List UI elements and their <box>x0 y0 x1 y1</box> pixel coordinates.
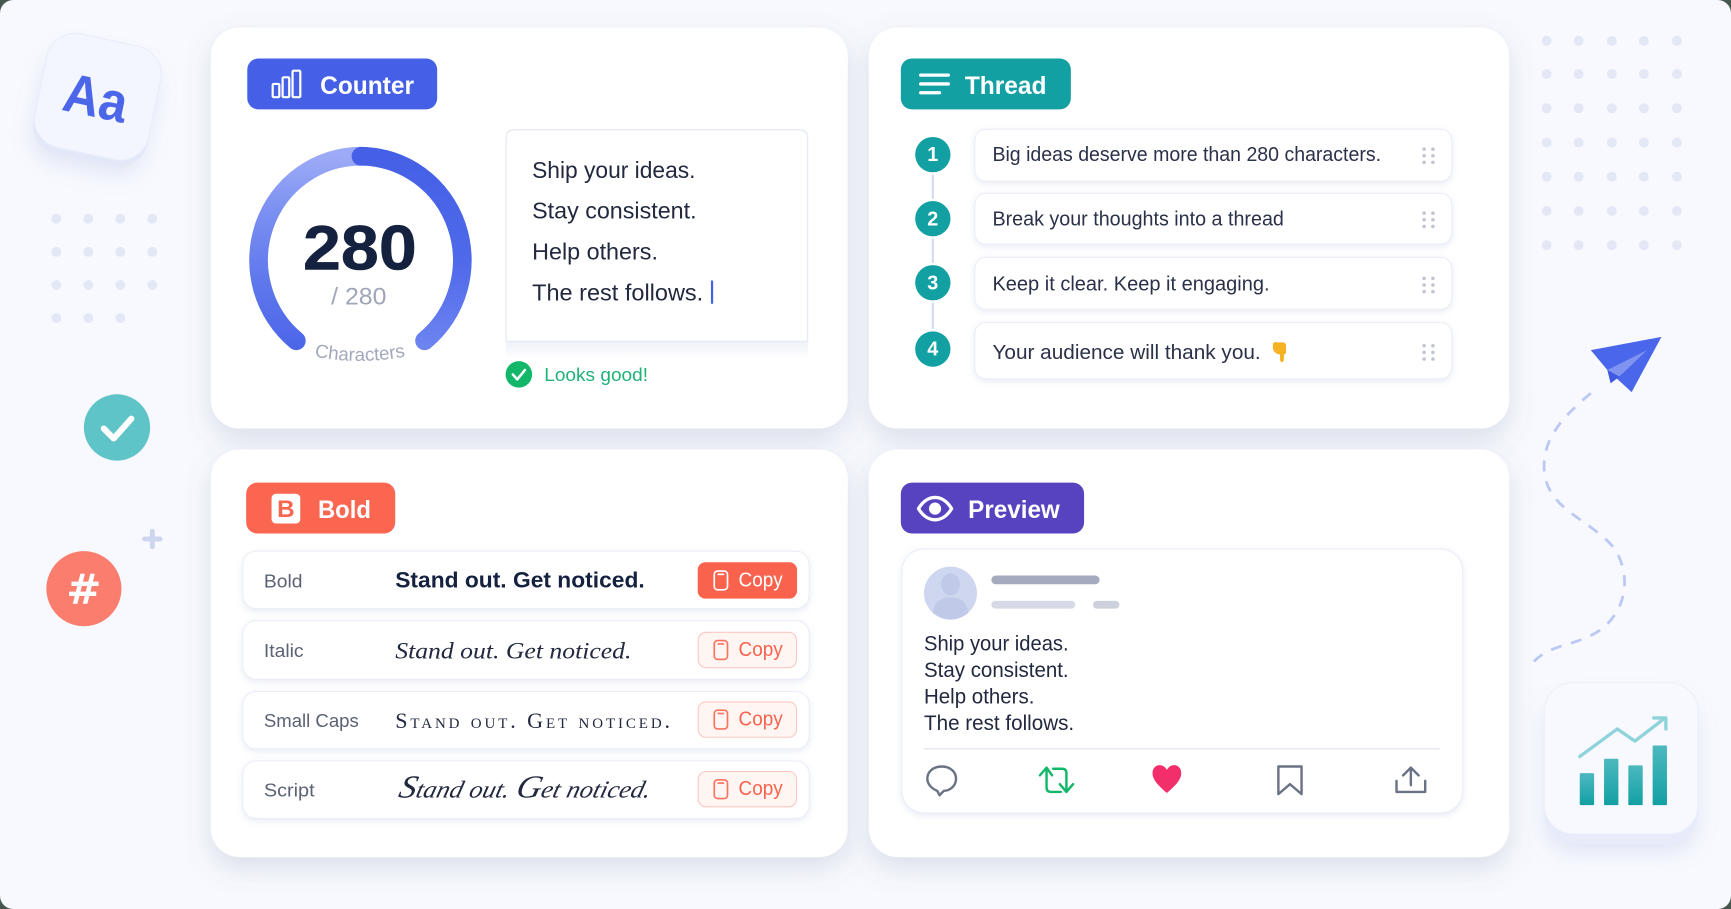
style row: italic: Stand out. Get noticed. <box>395 638 631 664</box>
decoration: right dot grid <box>1542 36 1682 250</box>
badge: Preview <box>901 483 1084 533</box>
style row: script: Script <box>264 779 315 800</box>
style row: bold: Stand out. Get noticed. <box>395 568 645 593</box>
style row: italic <box>243 621 809 679</box>
thread row 4: Your audience will thank you. <box>992 342 1261 364</box>
icon: coral hashtag badge <box>46 551 121 626</box>
post text: Stay consistent. <box>924 659 1069 682</box>
panel: preview <box>869 450 1509 857</box>
arrow: dashed flight path <box>1531 393 1625 665</box>
icon: heart <box>1153 765 1181 793</box>
post text: The rest follows. <box>924 712 1074 735</box>
style row: bold: Bold <box>264 571 302 592</box>
thread connector and numbers <box>913 135 953 369</box>
thread row 1: Big ideas deserve more than 280 characters. <box>992 144 1381 166</box>
badge: Bold: Bold <box>318 496 371 524</box>
thread connector and numbers: 4 <box>927 339 938 361</box>
thread connector and numbers: 3 <box>927 272 938 294</box>
style row: small caps: Stand out. Get noticed. <box>395 708 670 733</box>
style row: small caps: Copy <box>739 709 783 731</box>
text input box: The rest follows. <box>532 279 703 305</box>
badge: Bold <box>246 483 395 533</box>
gauge: character count ring: Characters <box>316 344 404 361</box>
text input box: Help others. <box>532 239 658 265</box>
style row: bold <box>243 551 809 609</box>
panel: counter <box>204 50 855 447</box>
post card <box>902 549 1463 813</box>
thread row 3: Keep it clear. Keep it engaging. <box>992 273 1270 295</box>
icon: share <box>1397 768 1425 792</box>
panel: bold <box>211 450 848 857</box>
style row: script: Stand out. Get noticed. <box>395 770 656 805</box>
icon: teal check badge <box>84 394 150 461</box>
badge: Thread: Thread <box>965 72 1047 100</box>
badge: Preview: Preview <box>968 496 1060 524</box>
post text: Ship your ideas. <box>924 633 1069 656</box>
panel: thread <box>869 28 1509 429</box>
decoration: left dot grid <box>51 214 157 323</box>
badge: Thread <box>901 59 1071 109</box>
gauge: character count ring: 280 <box>303 213 417 284</box>
post text: Help others. <box>924 686 1034 709</box>
icon: plus <box>145 531 160 547</box>
icon: paper plane <box>1591 337 1661 392</box>
icon: comment <box>927 767 956 795</box>
thread row 4 <box>975 323 1452 379</box>
style row: script: Copy <box>739 778 783 800</box>
thread row 2 <box>975 193 1452 244</box>
gauge: character count ring: / 280 <box>331 283 386 310</box>
icon: bookmark <box>1278 767 1302 794</box>
thread row 2: Break your thoughts into a thread <box>992 208 1284 230</box>
badge: Counter: Counter <box>320 72 414 100</box>
icon: growth chart tile <box>1544 683 1698 844</box>
text input box: Ship your ideas. <box>532 157 695 183</box>
status: looks good: Looks good! <box>544 364 648 385</box>
icon: Aa typography tile <box>28 28 167 172</box>
style row: italic: Italic <box>264 640 304 661</box>
icon: repost <box>1040 768 1073 792</box>
gauge: character count ring <box>249 146 472 361</box>
style row: script <box>243 761 809 818</box>
style row: small caps <box>243 691 809 749</box>
text input box <box>506 130 808 359</box>
status: looks good <box>506 361 648 388</box>
icon: coral hashtag badge: # <box>66 565 101 614</box>
text input box: Stay consistent. <box>532 198 697 224</box>
thread row 1 <box>975 129 1452 181</box>
thread connector and numbers: 2 <box>927 208 938 230</box>
icon: Aa typography tile: Aa <box>58 61 135 135</box>
style row: small caps: Small Caps <box>264 710 359 731</box>
badge: Bold: B <box>277 496 295 523</box>
name placeholders <box>991 575 1119 609</box>
badge: Counter <box>247 59 437 109</box>
thread connector and numbers: 1 <box>927 144 938 166</box>
style row: bold: Copy <box>739 569 783 591</box>
style row: italic: Copy <box>739 639 783 661</box>
avatar <box>924 567 977 620</box>
thread row 3 <box>975 257 1452 309</box>
post text <box>924 633 1074 735</box>
